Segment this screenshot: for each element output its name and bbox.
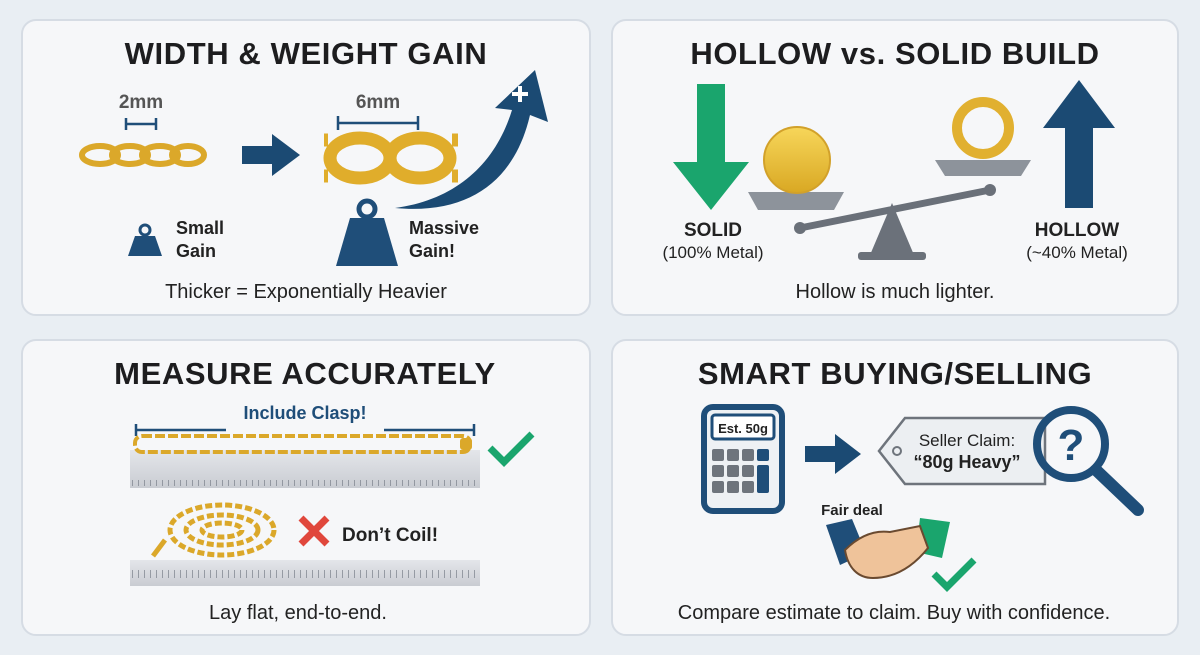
- title: HOLLOW vs. SOLID BUILD: [690, 36, 1100, 71]
- label: massive gain: Gain!: [409, 241, 455, 261]
- panel: width & weight gain: [22, 20, 590, 315]
- hollow gold ring: [957, 102, 1009, 154]
- arrow: [242, 134, 300, 176]
- label: hollow: (~40% Metal): [1026, 243, 1128, 262]
- title: width & weight gain: WIDTH & WEIGHT GAIN: [125, 36, 487, 71]
- balance scale: [748, 102, 1031, 260]
- icon: red x: [301, 518, 327, 544]
- label: small gain: Small: [176, 218, 224, 238]
- title: SMART BUYING/SELLING: [698, 356, 1092, 391]
- label: fair deal: Fair deal: [821, 502, 883, 519]
- label: 2mm: [119, 92, 163, 130]
- solid gold coin: [764, 127, 830, 193]
- panel: measure accurately: [22, 340, 590, 635]
- ruler bottom with coiled chain: [130, 505, 480, 586]
- icon: calculator: Est. 50g: [718, 421, 768, 436]
- label: don't coil: Don’t Coil!: [342, 525, 438, 546]
- icon: small weight: [128, 225, 162, 256]
- caption: Lay flat, end-to-end.: [209, 602, 387, 624]
- price tag: seller claim: [879, 418, 1045, 484]
- label: solid: (100% Metal): [662, 243, 764, 262]
- icon: calculator: [704, 407, 782, 511]
- label: solid: SOLID: [684, 220, 742, 241]
- label: hollow: HOLLOW: [1035, 220, 1119, 241]
- label: massive gain: Massive: [409, 218, 479, 238]
- arrow: [805, 434, 861, 474]
- icon: green down arrow: [673, 84, 749, 210]
- label: include clasp: Include Clasp!: [243, 403, 367, 423]
- caption: Compare estimate to claim. Buy with confidence.: [678, 602, 1110, 624]
- label: 2mm: 2mm: [119, 92, 163, 113]
- label: 6mm: 6mm: [356, 92, 400, 113]
- caption: Hollow is much lighter.: [796, 281, 994, 303]
- label: small gain: Gain: [176, 241, 216, 261]
- icon: curved growth arrow with plus: [395, 70, 548, 209]
- icon: green check: [934, 560, 974, 587]
- icon: blue up arrow: [1043, 80, 1115, 208]
- panel: hollow vs solid: [612, 20, 1178, 315]
- price tag: seller claim: Seller Claim:: [919, 431, 1015, 450]
- caption: Thicker = Exponentially Heavier: [165, 281, 447, 303]
- panel: smart buying/selling: [612, 340, 1178, 635]
- big chain: [324, 138, 458, 178]
- icon: big weight: [336, 201, 398, 266]
- label: include clasp: [136, 403, 474, 436]
- title: MEASURE ACCURATELY: [114, 356, 496, 391]
- label: 6mm: [338, 92, 418, 130]
- price tag: seller claim: “80g Heavy”: [913, 452, 1021, 472]
- straight chain on ruler: [130, 436, 480, 488]
- icon: magnifier with question: [1037, 410, 1138, 510]
- icon: green check: [490, 434, 532, 462]
- icon: magnifier with question: ?: [1058, 421, 1084, 470]
- icon: handshake: [826, 518, 950, 578]
- small chain: [82, 146, 204, 164]
